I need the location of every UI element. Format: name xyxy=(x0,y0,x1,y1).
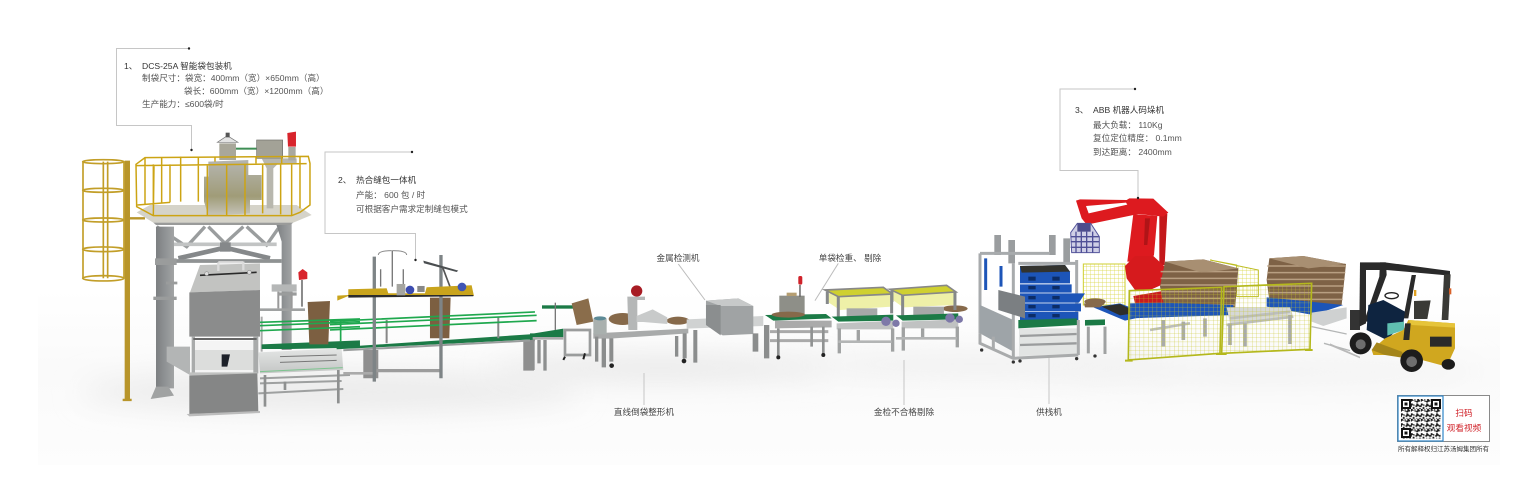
callout text 2: 热合缝包一体机 xyxy=(356,174,417,185)
red ABB palletizing robot xyxy=(1076,198,1168,303)
bag tray and lower rails xyxy=(258,308,350,407)
yellow chassis xyxy=(1372,320,1455,367)
label connector: check weigher xyxy=(815,263,838,301)
callout text 3: 到达距离： 2400mm xyxy=(1093,146,1172,157)
palletizing zone xyxy=(1071,198,1350,361)
callout text 3: ABB 机器人码垛机 xyxy=(1093,104,1165,115)
green guide rails xyxy=(330,312,537,330)
forklift truck xyxy=(1330,262,1455,372)
machine 1: steel tower and weighing hopper xyxy=(151,223,360,416)
wheels xyxy=(1350,332,1455,372)
brown bag on infeed xyxy=(1084,298,1106,305)
pallet feeder machine xyxy=(980,235,1106,364)
label: pallet feeder xyxy=(1036,358,1062,417)
label: metal reject: 金检不合格剔除 xyxy=(874,406,934,417)
heat-seal sewing unit xyxy=(337,251,474,382)
blue conveyor right xyxy=(1267,297,1343,315)
check weighing scale xyxy=(765,276,832,359)
callout frame 2 xyxy=(325,151,417,261)
callout text 2: 产能： 600 包 / 时 xyxy=(356,189,426,200)
callout text 2 xyxy=(338,174,468,214)
metal detector tunnel xyxy=(687,298,769,358)
green guide rails start xyxy=(260,319,360,342)
pallet and conveyor blue bases xyxy=(1084,303,1233,321)
callout text 1: 袋长：600mm（宽）×1200mm（高） xyxy=(184,85,328,96)
machine 1: safety ladder xyxy=(83,160,145,401)
tan paper bag 1 xyxy=(308,301,330,344)
tower truss xyxy=(157,227,282,261)
label: bag shaper xyxy=(614,373,674,417)
label connector: metal detector xyxy=(678,264,705,300)
filling station xyxy=(187,337,260,416)
hopper box xyxy=(189,262,260,337)
back safety fences xyxy=(1083,260,1258,305)
tower columns xyxy=(151,223,297,399)
operator seat and back panel xyxy=(1367,288,1451,340)
floor shadow xyxy=(86,346,1426,421)
finished bag stack 2 xyxy=(1267,256,1346,305)
QR code panel xyxy=(1398,396,1490,442)
callout text 3: 复位定位精度： 0.1mm xyxy=(1093,132,1182,143)
callout text 3: 3、 xyxy=(1075,105,1088,115)
stacked blue pallets xyxy=(1020,265,1085,320)
yellow guard rail xyxy=(136,156,310,216)
long conveyor belt start xyxy=(262,340,360,349)
callout text 3: 最大负载： 110Kg xyxy=(1093,119,1163,130)
reject station 1 xyxy=(825,287,900,353)
callout frame 1 xyxy=(116,47,193,151)
finished bag stack 1 xyxy=(1160,259,1238,310)
scan prompt: 观看视频 xyxy=(1447,422,1482,433)
scan prompt xyxy=(1447,407,1482,433)
callout text 1: DCS-25A 智能袋包装机 xyxy=(142,60,232,71)
feeder base with green belt xyxy=(980,318,1105,364)
callout text 1: 生产能力：≤600袋/时 xyxy=(142,98,224,109)
pallet roller frames xyxy=(1150,307,1350,351)
side lamp and bracket xyxy=(272,269,307,308)
label: check weigh and reject: 单袋检重、 剔除 xyxy=(819,252,882,263)
robot gripper xyxy=(1071,223,1099,253)
label: metal detector: 金属检测机 xyxy=(657,252,700,263)
fork and carriage xyxy=(1330,310,1360,358)
feeder clamp and side panel xyxy=(980,290,1025,352)
label: bag shaper: 直线倒袋整形机 xyxy=(614,406,674,417)
label: pallet feeder: 供栈机 xyxy=(1036,406,1062,417)
conveyors, shaper, metal detector, check weigher, reject stations xyxy=(530,263,968,371)
copyright note: 所有解释权归江苏汤姆集团所有 xyxy=(1398,444,1490,453)
callout text 1 xyxy=(124,60,328,109)
callout text 2: 可根据客户需求定制缝包模式 xyxy=(356,203,468,214)
label: metal reject xyxy=(874,360,934,417)
front safety fences xyxy=(1125,283,1313,361)
short incline conveyor xyxy=(530,298,593,371)
conveyor and sewing machine xyxy=(330,251,537,382)
conveyor legs xyxy=(337,317,535,378)
straight bag-turning shaping machine xyxy=(593,285,697,368)
paper bag 2 xyxy=(430,298,451,338)
reject station 2 xyxy=(890,285,968,351)
machine 1: top platform and guard rail xyxy=(136,132,312,225)
platform deck xyxy=(137,205,312,223)
QR code xyxy=(1398,396,1443,441)
callout text 1: 1、 xyxy=(124,61,137,71)
callout frame 3 xyxy=(1060,88,1139,199)
left chute xyxy=(167,347,190,375)
callout text 1: 制袋尺寸：袋宽：400mm（宽）×650mm（高） xyxy=(142,72,325,83)
scan prompt: 扫码 xyxy=(1455,407,1473,418)
callout text 2: 2、 xyxy=(338,175,351,185)
mast and overhead guard xyxy=(1359,262,1451,327)
feeder top frame xyxy=(980,235,1077,333)
callout text 3 xyxy=(1075,104,1182,157)
upper packing unit xyxy=(204,132,297,216)
